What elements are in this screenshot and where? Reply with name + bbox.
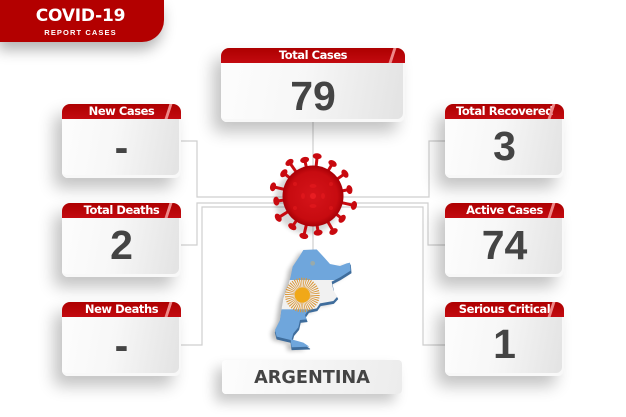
panel: new cases: [62, 104, 181, 178]
panel: total recovered: 3: [493, 123, 516, 169]
title: COVID-19: COVID-19: [36, 6, 125, 26]
panel: total cases: 79: [290, 73, 336, 119]
panel: serious critical: [445, 302, 564, 376]
title banner: [0, 0, 164, 42]
panel: new cases: -: [115, 124, 128, 170]
label: country name: [222, 360, 402, 394]
panel: total recovered: [445, 104, 564, 178]
panel: new deaths: [62, 302, 181, 376]
panel: total recovered: Total Recovered: [456, 104, 553, 118]
subtitle: report cases: REPORT CASES: [44, 28, 117, 37]
panel: serious critical: Serious Critical: [459, 302, 550, 316]
panel: total deaths: 2: [110, 222, 133, 268]
panel: total deaths: [62, 203, 181, 277]
panel: new deaths: New Deaths: [85, 302, 158, 316]
panel: active cases: 74: [482, 222, 527, 268]
icon: virus: [270, 153, 357, 239]
panel: new deaths: -: [115, 322, 128, 368]
panel: total deaths: Total Deaths: [84, 203, 159, 217]
panel: total cases: [221, 48, 405, 122]
panel: new cases: New Cases: [89, 104, 154, 118]
sun: [290, 283, 315, 307]
icon: Argentina flag map: [269, 250, 352, 353]
panel: active cases: Active Cases: [466, 203, 543, 217]
label: country name: ARGENTINA: [254, 368, 370, 388]
panel: active cases: [445, 203, 564, 277]
panel: total cases: Total Cases: [279, 48, 347, 62]
panel: serious critical: 1: [493, 321, 516, 367]
